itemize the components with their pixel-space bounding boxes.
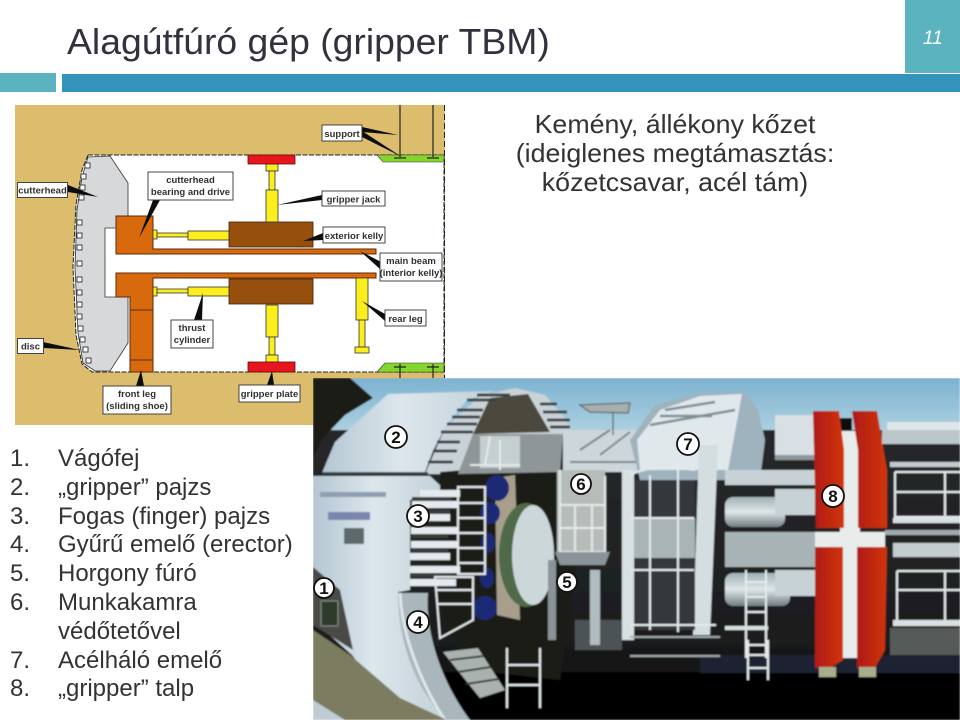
numbered list: 4.: [10, 531, 30, 558]
label: front leg: (sliding shoe): [106, 401, 168, 412]
marker 8: [822, 485, 844, 507]
marker 5: 5: [562, 573, 572, 592]
label: exterior kelly: exterior kelly: [325, 231, 384, 242]
label: cutterhead bearing and drive: cutterhead: [166, 175, 215, 186]
marker 7: [677, 433, 699, 455]
main beam and front leg: [116, 216, 376, 372]
label: main beam: (interior kelly): [380, 268, 442, 279]
access ladders: [435, 436, 540, 708]
finger ring: [425, 388, 572, 475]
gripper plates: [248, 155, 295, 372]
scaffold platform: [563, 430, 640, 472]
ground shadow: [313, 672, 960, 720]
label: gripper plate: [239, 385, 300, 402]
numbered list: Acélháló emelő: [58, 647, 222, 674]
interior dark cavity: [440, 462, 590, 680]
cutterhead body: [75, 156, 128, 371]
label: gripper plate: gripper plate: [241, 389, 298, 400]
marker 3: 3: [413, 507, 423, 526]
label: gripper jack: gripper jack: [327, 194, 381, 206]
label: support: support: [324, 129, 361, 140]
marker 3: [407, 505, 429, 527]
numbered list: 8.: [10, 675, 30, 702]
lower stair: [443, 648, 505, 698]
exterior kelly: [229, 222, 313, 304]
numbered list: Vágófej: [58, 445, 139, 472]
erector ring: [398, 593, 470, 720]
tunnel interior: [73, 155, 444, 372]
ring slots: [428, 395, 570, 462]
green mesh supports: [377, 155, 444, 372]
numbered list: 5.: [10, 560, 30, 587]
marker 2: [385, 426, 407, 448]
marker 4: [407, 611, 429, 633]
marker 2: 2: [391, 428, 401, 447]
numbered list: „gripper” pajzs: [58, 474, 211, 501]
page number box: [905, 0, 960, 73]
mast lamp: [580, 403, 630, 435]
marker 5: [557, 572, 577, 592]
thrust cylinders: [153, 230, 230, 296]
beige inner wall: [495, 475, 520, 620]
rock description text: (ideiglenes megtámasztás:: [516, 138, 834, 168]
label: main beam: main beam: [386, 256, 436, 267]
gripper jacks: [266, 164, 369, 362]
label: cutterhead bearing and drive: [148, 172, 233, 200]
rock description text: kőzetcsavar, acél tám): [542, 167, 808, 197]
hydraulic cylinders: [725, 497, 785, 527]
finger teeth: [410, 490, 460, 586]
right boundary dashed line: [444, 105, 446, 378]
marker 4: 4: [413, 613, 423, 632]
label: exterior kelly: [323, 227, 385, 243]
gripper shoe: white cross: [815, 431, 885, 658]
label: cutterhead bearing and drive: bearing and drive: [151, 187, 230, 198]
numbered list: Munkakamra: [58, 589, 197, 616]
rear railings: [895, 472, 960, 622]
lower grey stair zone: [575, 620, 622, 650]
label: support: [322, 125, 362, 141]
numbered list: 2.: [10, 474, 30, 501]
upper light platform: [458, 434, 563, 474]
rock description text: [516, 109, 834, 197]
canopy main rib: [693, 445, 718, 635]
numbered list: 6.: [10, 589, 30, 616]
label: thrust cylinder: [171, 320, 213, 348]
photo: gripper TBM machine with numbered parts: [313, 378, 960, 720]
label: main beam: [380, 253, 442, 281]
gripper shoe: red plates: [813, 411, 887, 668]
numbered list: védőtetővel: [58, 618, 181, 645]
header accent square: [0, 73, 56, 92]
side logo marks: [320, 492, 386, 544]
disc cutters: [77, 163, 91, 363]
marker 7: 7: [683, 435, 693, 454]
top-left dark rock: [313, 378, 373, 458]
shield gripper plate: [322, 391, 497, 473]
shield lower body: [313, 476, 447, 720]
foreground rock: [313, 630, 447, 720]
sky: [313, 378, 960, 448]
label: thrust cylinder: thrust: [179, 323, 206, 334]
front window cutterhead area: [313, 567, 353, 650]
numbered list: Fogas (finger) pajzs: [58, 503, 270, 530]
leader lines: [43, 127, 402, 386]
label: disc: [18, 338, 44, 354]
support bolts: [394, 105, 439, 378]
shoe feet: [819, 667, 836, 677]
marker 1: 1: [319, 579, 329, 598]
right window column: [622, 470, 634, 640]
rock description text: Kemény, állékony kőzet: [535, 109, 815, 139]
header bar: [62, 74, 960, 92]
marker 8: 8: [828, 487, 838, 506]
steel canopy arch: [630, 392, 765, 480]
label: disc: disc: [21, 342, 40, 352]
numbered list: 7.: [10, 647, 30, 674]
label: thrust cylinder: cylinder: [174, 335, 211, 346]
central drum: [499, 503, 553, 607]
page number box: 11: [923, 28, 943, 49]
label: front leg: front leg: [118, 389, 156, 400]
machine dark background: [313, 430, 960, 720]
title: Alagútfúró gép (gripper TBM): [67, 21, 550, 62]
numbered list: 3.: [10, 503, 30, 530]
mesh cage lower: [634, 480, 695, 630]
middle grey panel: [725, 532, 815, 567]
label: gripper jack: [322, 191, 385, 206]
rear upper platform: [775, 415, 815, 455]
side ladder: [746, 570, 766, 658]
numbered list: Gyűrű emelő (erector): [58, 531, 293, 558]
marker 6: 6: [576, 475, 586, 494]
label: rear leg: [385, 310, 426, 326]
label: cutterhead: cutterhead: [18, 186, 67, 196]
marker 1: [314, 578, 334, 598]
label: rear leg: rear leg: [388, 314, 423, 325]
numbered list: 1.: [10, 445, 30, 472]
marker 6: [571, 474, 591, 494]
rear machine frame: [887, 422, 960, 430]
numbered list: „gripper” talp: [58, 675, 194, 702]
numbered list: [10, 445, 293, 702]
numbered list: Horgony fúró: [58, 560, 197, 587]
label: front leg: [103, 386, 171, 414]
anchor drill: [590, 570, 600, 645]
blue hydraulic units: [473, 475, 509, 620]
work chamber cage: [557, 470, 605, 552]
rock background: [15, 105, 445, 425]
